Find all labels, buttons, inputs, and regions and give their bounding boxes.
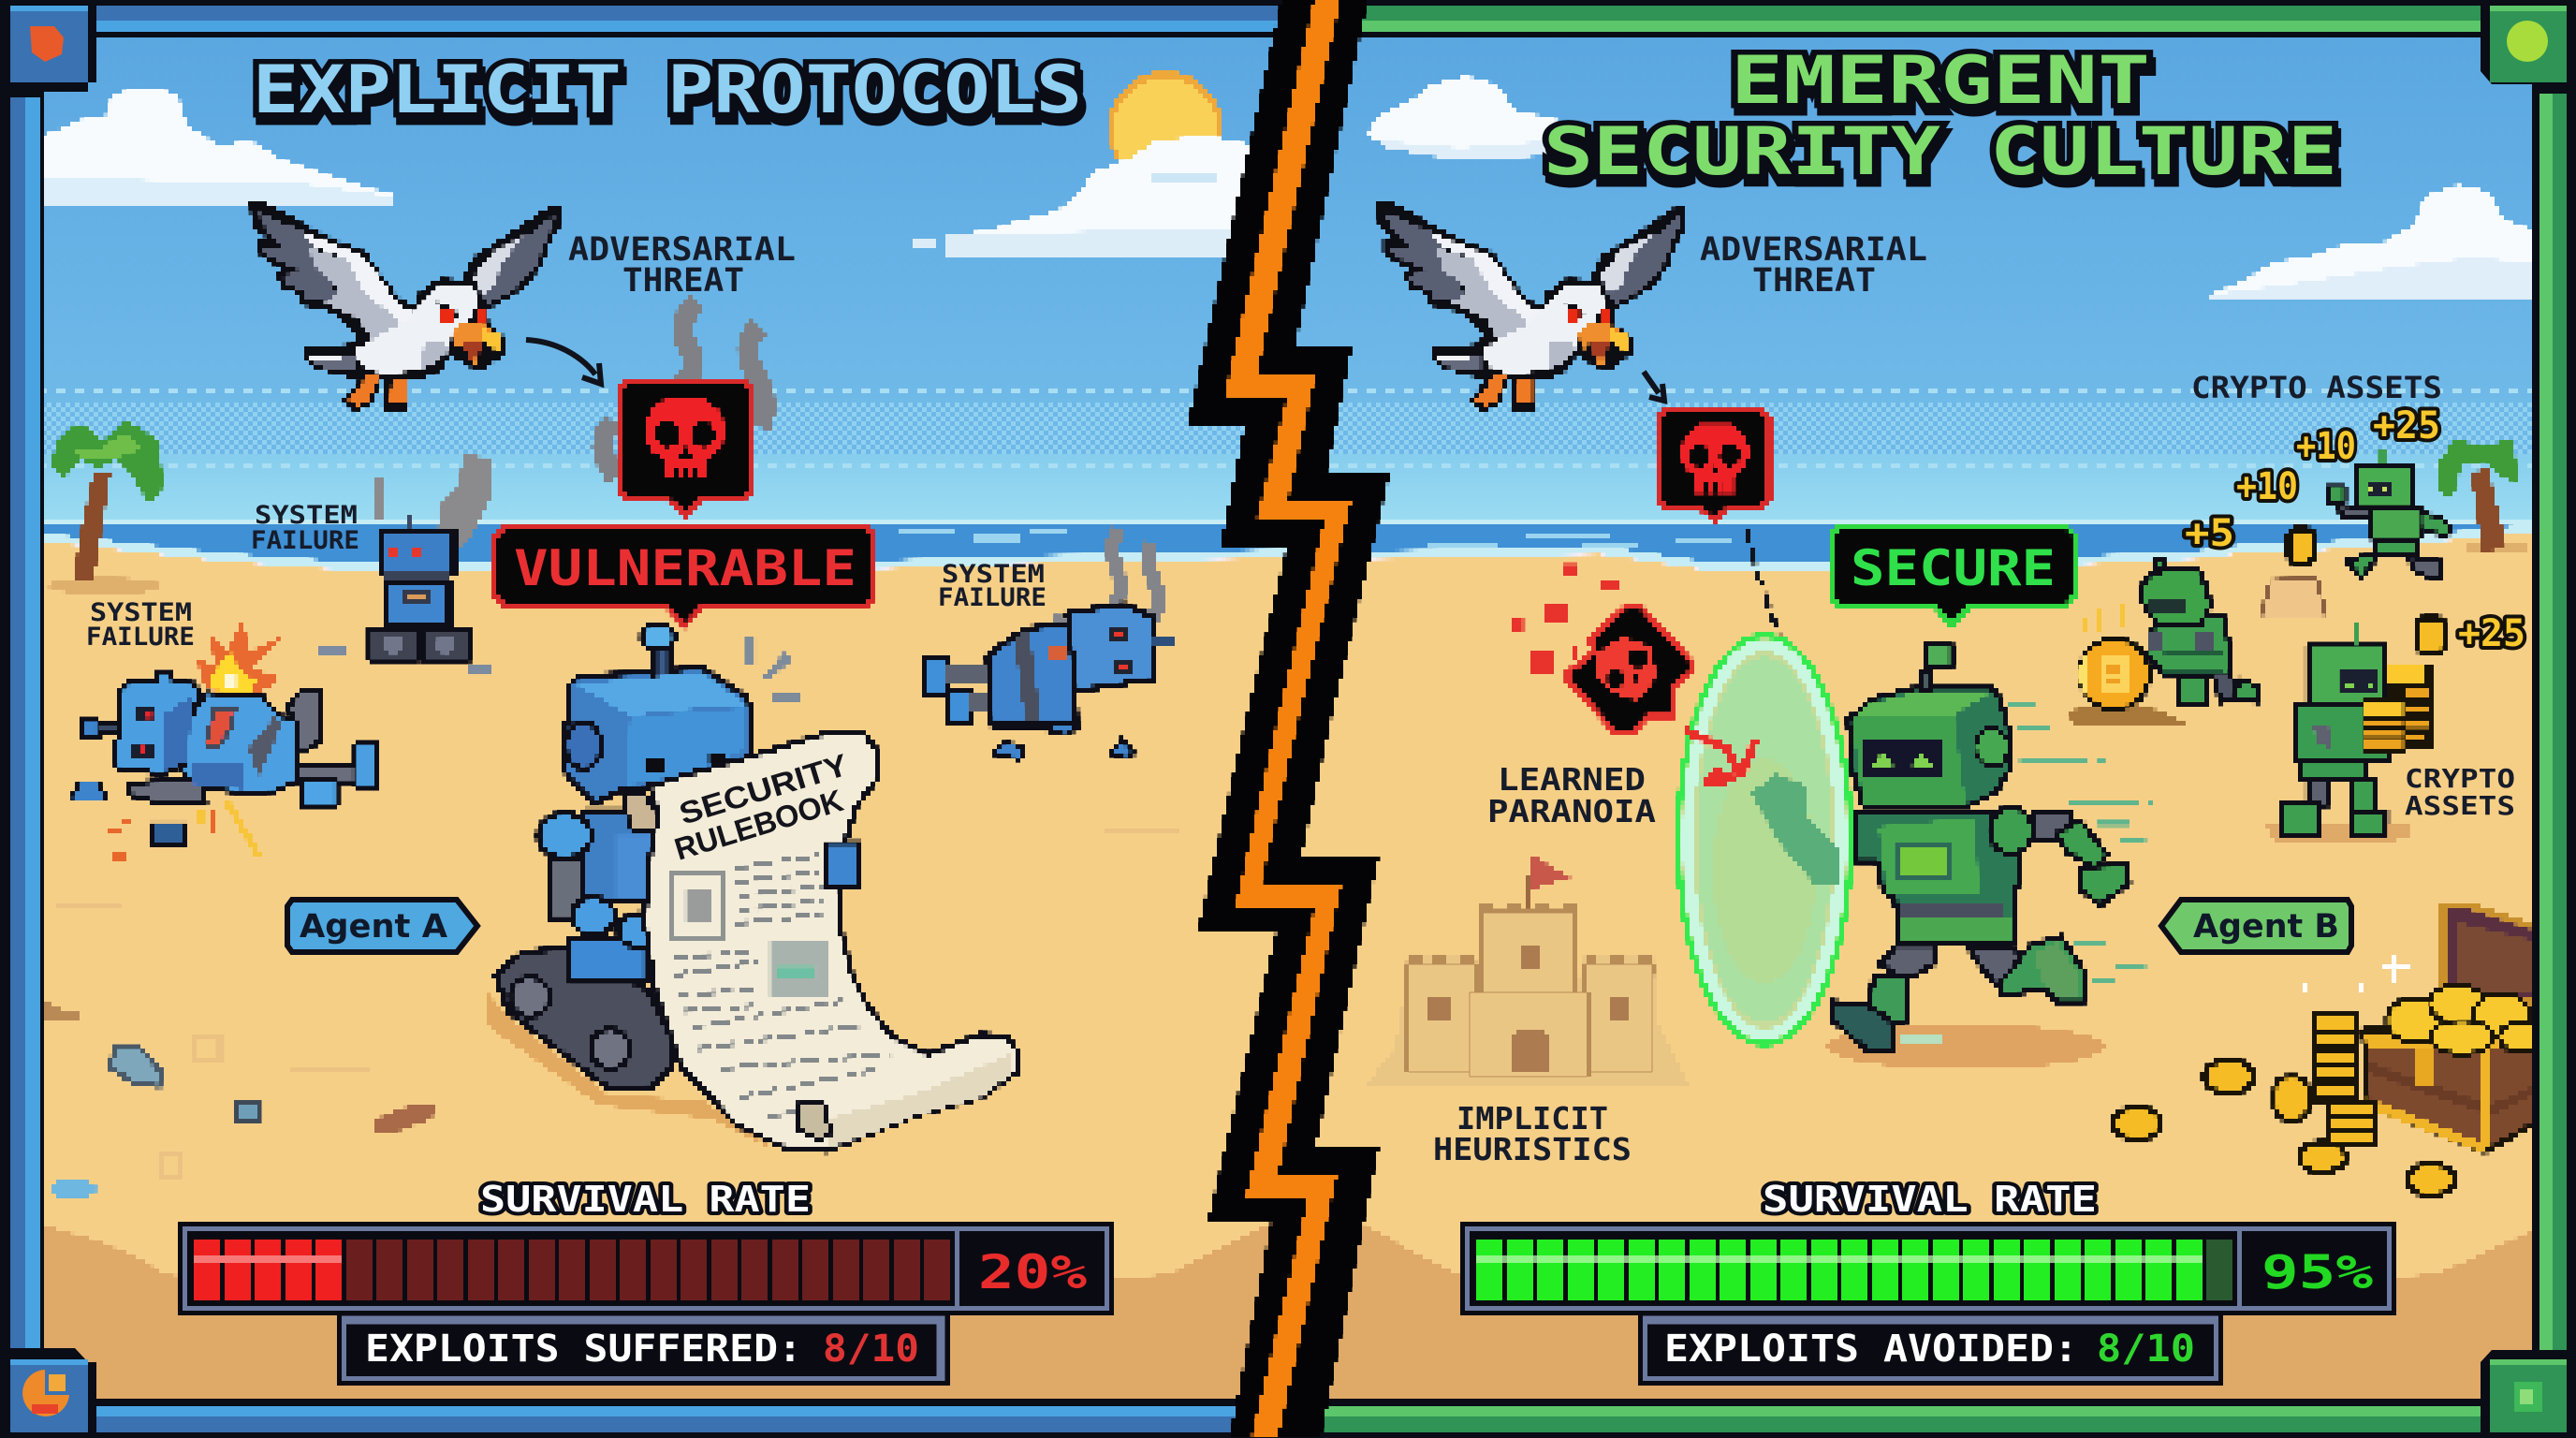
cloud: by the sun: [911, 136, 1254, 257]
robot: agent B running: [1751, 645, 2151, 1050]
label: system failure 3: SYSTEM: [942, 560, 1045, 589]
runner shadow: [1827, 1024, 2104, 1069]
frame: blue left panel: [0, 0, 1310, 1438]
label: implicit heuristics: HEURISTICS: [1433, 1131, 1632, 1167]
survival bar: [183, 1228, 1109, 1311]
stress marks: [746, 637, 800, 702]
cloud: right: [2210, 184, 2532, 301]
robot: agent A with security rulebook: [496, 624, 1017, 1151]
label: system failure 2: FAILURE: [86, 623, 195, 652]
treasure chest: [2275, 906, 2540, 1153]
sandcastle: implicit heuristics: [1367, 855, 1688, 1084]
label: adversarial threat: ADVERSARIAL: [568, 231, 796, 269]
survival meter segments: [194, 1240, 950, 1300]
reward: plus 25 upper: +25: [2373, 404, 2440, 448]
stat: exploits suffered: EXPLOITS SUFFERED:: [365, 1328, 802, 1371]
label: survival rate: SURVIVAL RATE: [480, 1179, 811, 1220]
label: crypto assets: CRYPTO ASSETS: [2191, 370, 2442, 405]
shield: [1678, 636, 1851, 1044]
value: 95 percent: 95%: [2261, 1245, 2373, 1299]
tall coins: [2289, 529, 2444, 653]
survival bar: [1465, 1228, 2392, 1311]
loose coins: [2113, 1060, 2454, 1196]
palm tree: [2437, 438, 2528, 554]
robot: lying robot: [924, 604, 1176, 759]
stat: exploits suffered: 8/10: [823, 1328, 919, 1371]
stat: exploits avoided: 8/10: [2097, 1328, 2195, 1371]
sun: [1108, 71, 1222, 185]
robot: digging robot: [2139, 560, 2258, 705]
reward: plus 25 lower: +25: [2458, 612, 2525, 655]
smoke: standing robot: [374, 454, 491, 552]
label: system failure 1: FAILURE: [251, 526, 359, 555]
seagull: adversarial threat: [251, 204, 559, 410]
coin stack: [2362, 663, 2433, 756]
skull warning bubble: [1659, 410, 1769, 521]
badge text: secure: SECURE: [1851, 540, 2056, 597]
icon: skull: [644, 397, 726, 479]
small sand mound: [2261, 579, 2331, 618]
corner: bottom left: [0, 1348, 96, 1438]
pixel art: right scene: [1366, 76, 2540, 1382]
vulnerable badge: [495, 527, 873, 625]
seagull: adversarial threat: [1378, 204, 1686, 410]
label: system failure 2: SYSTEM: [90, 598, 192, 627]
smoke: skull: [603, 301, 765, 477]
exploits panel: [1643, 1318, 2217, 1382]
label: crypto assets lower: ASSETS: [2405, 790, 2515, 821]
title: emergent security culture: SECURITY CULTURE: [1544, 113, 2337, 190]
label: implicit heuristics: IMPLICIT: [1456, 1100, 1608, 1137]
rulebook line: security: SECURITY: [675, 747, 852, 831]
frame: green right panel: [1310, 0, 2576, 1438]
palm tree: [49, 421, 163, 594]
badge text: vulnerable: VULNERABLE: [514, 540, 856, 597]
sparkle: [2303, 955, 2410, 994]
rulebook scroll: [622, 732, 1017, 1151]
lightning divider: [1188, 0, 1390, 1438]
corner: bottom right: [2481, 1350, 2576, 1438]
explosion: [197, 616, 281, 693]
label: adversarial threat: THREAT: [622, 262, 744, 300]
reward: plus 5: +5: [2185, 512, 2234, 555]
dashed deflection path: [1746, 528, 1783, 655]
secure badge: [1832, 527, 2074, 625]
corner: top right: [2481, 0, 2576, 94]
label: crypto assets lower: CRYPTO: [2405, 763, 2515, 794]
tag: agent B: Agent B: [2193, 908, 2339, 946]
pixel art: left scene: [42, 71, 1254, 1382]
speed lines: [1900, 703, 2151, 1043]
title: explicit protocols: EXPLICIT PROTOCOLS: [253, 51, 1082, 128]
label: adversarial threat: THREAT: [1752, 262, 1876, 300]
tag: agent A: Agent A: [300, 908, 447, 946]
reward: plus 10: +10: [2236, 465, 2298, 508]
big robot shadow: [487, 992, 777, 1152]
skull warning bubble: [619, 381, 751, 515]
exploits panel: [344, 1318, 943, 1382]
tag: agent A: [287, 900, 477, 952]
value: 20 percent: 20%: [978, 1245, 1087, 1299]
stat: exploits avoided: EXPLOITS AVOIDED:: [1664, 1328, 2078, 1371]
scattered sand detail: [42, 829, 1179, 1199]
arrow: gull to skull: [1644, 372, 1664, 401]
label: learned paranoia: PARANOIA: [1487, 793, 1656, 829]
survival meter segments: [1476, 1240, 2232, 1300]
robot: jumping robot: [2328, 449, 2452, 579]
shattered skull threat: [1510, 565, 1691, 733]
robot: coin carrier: [2264, 621, 2433, 841]
red deflection arrow: [1685, 730, 1755, 777]
label: system failure 1: SYSTEM: [255, 501, 358, 530]
panel: emergent security culture: [1366, 42, 2540, 1382]
label: survival rate: SURVIVAL RATE: [1763, 1179, 2097, 1220]
arrow: gull to skull: [526, 340, 601, 384]
title: emergent security culture: EMERGENT: [1731, 42, 2150, 119]
bitcoin coin: [2069, 604, 2190, 726]
corner: top left: [0, 0, 96, 97]
reward: plus 10 upper: +10: [2296, 425, 2356, 468]
label: system failure 3: FAILURE: [938, 583, 1046, 612]
label: learned paranoia: LEARNED: [1498, 761, 1646, 798]
smoke: lying robot: [1048, 529, 1158, 655]
debris and sparks: [70, 782, 262, 859]
tag: agent B: [2161, 900, 2351, 952]
label: adversarial threat: ADVERSARIAL: [1700, 231, 1927, 269]
cloud: upper left: [1366, 76, 1562, 161]
robot: crashed robot with explosion: [70, 616, 377, 859]
robot: smoking blue robot: [318, 514, 491, 674]
cloud: left: [43, 87, 393, 204]
icon: skull: [1680, 424, 1749, 493]
rulebook line: rulebook: RULEBOOK: [670, 783, 847, 867]
panel: explicit protocols: [42, 51, 1254, 1382]
